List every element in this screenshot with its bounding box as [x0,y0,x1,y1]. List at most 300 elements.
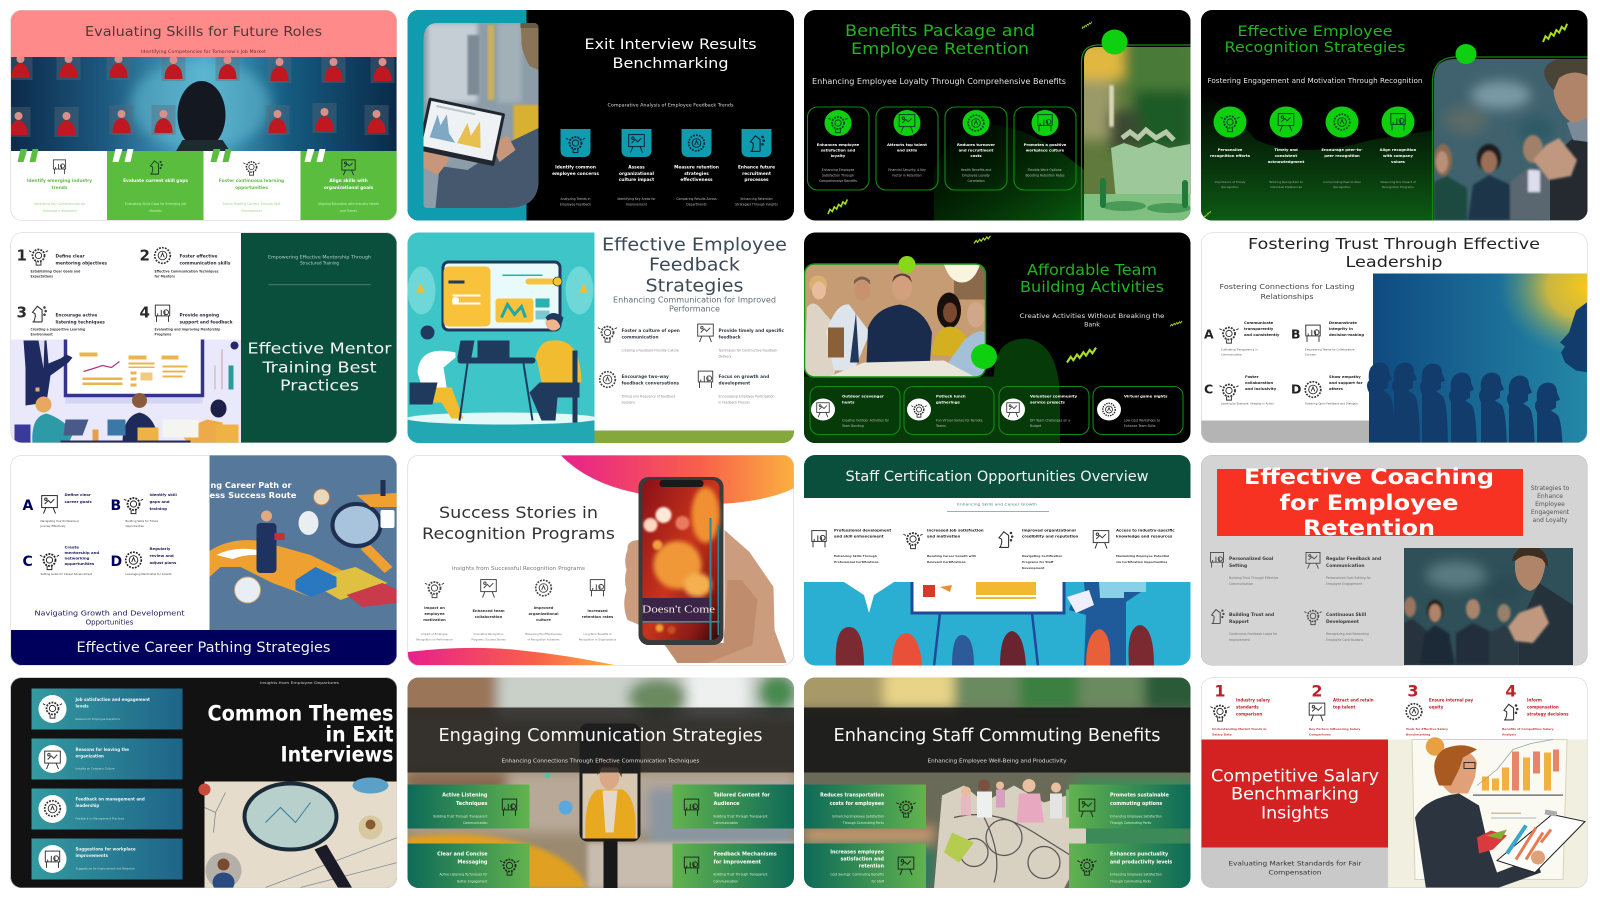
four numbered points: Comparisons [1309,732,1331,736]
four teal icon points [552,129,778,206]
right point cards: Enhancing Employee Satisfaction [1110,814,1162,818]
four outlined cards: Boosting Retention Rates [1025,174,1065,178]
four outlined cards: Enhancing Employee [822,168,854,172]
panel: Engaging Communication Strategies [398,668,804,888]
four outlined cards: costs [970,153,982,158]
four numbered points: 2 [1311,682,1323,700]
right point cards: Building Trust Through Transparent [714,814,768,818]
photo frame and dot [1432,44,1588,221]
right point cards: Tailored Content for [714,792,770,798]
subtitle: Relationships [1260,293,1314,301]
four point columns [10,149,398,221]
white content band: credibility and reputation [1022,534,1079,538]
panel: Common Themes in Exit Interviews [10,678,398,892]
left point cards: Enhancing Employee Satisfaction [832,814,884,818]
title: in Exit [326,722,394,746]
four career steps: Building Skills for Future [126,519,158,523]
four coaching points: Continuous Feedback Loops for [1229,632,1278,636]
four activity cards: Virtual game nights [1124,394,1168,398]
panel: Effective Employee Recognition Strategies [1201,10,1588,221]
left point cards [408,784,530,888]
illustration: training session [804,577,1191,666]
grey bar [1201,420,1373,444]
four feedback points: Encourage two-way [622,374,669,380]
four teal icon points: Improvement [626,202,648,206]
four point columns: Tomorrow's Workforce [41,209,77,213]
four circle points: Individual Preferences [1270,185,1302,189]
photo: smartphone filming speaker [398,668,804,888]
dark title band [408,708,794,772]
white content band: Professional Certifications [834,560,879,564]
right point cards: Audience [714,801,740,807]
four teal theme cards: leadership [76,803,99,808]
four outlined cards: workplace culture [1026,148,1065,152]
subtitle: Fostering Connections for Lasting [1220,283,1354,291]
title: Fostering Trust Through Effective [1248,235,1540,253]
right point cards: Enhances punctuality [1110,852,1169,858]
four leadership behaviours: Communicate [1244,320,1274,325]
four numbered points: 3 [1407,682,1419,700]
four outlined cards: Attracts top talent [887,142,927,147]
left point cards: Active Listening Techniques for [439,872,488,876]
four numbered points: 1 [1214,682,1226,700]
panel: Benefits Package and Employee Retention [804,10,1194,221]
four leadership behaviours: collaboration [1245,380,1274,385]
four numbered points: Inform [1527,698,1542,702]
green title side [241,232,398,444]
right point cards [1069,784,1191,888]
four recognition points: Programs: Success Stories [471,638,506,642]
right point cards: Through Commuting Perks [1109,880,1152,884]
four outlined cards: and skills [897,148,918,152]
white content band: Enhancing Skills and Career Growth [957,502,1037,506]
four coaching points: Regular Feedback and [1326,556,1381,562]
four numbered objectives: Provide ongoing [180,312,219,318]
four activity cards: Potluck lunch [936,394,966,398]
four recognition points: motivation [423,618,446,622]
four feedback points: feedback conversations [622,380,680,386]
four outlined cards [808,107,1076,190]
title: Exit Interview Results [584,37,756,53]
four circle points: Personalize [1218,147,1243,152]
four numbered points: top talent [1333,704,1355,710]
red title block [1217,469,1523,536]
photo: hand holding phone: Doesn't Come [642,604,715,616]
left point cards: Techniques [456,801,488,807]
photo: green paper people [1084,47,1190,220]
four numbered points: Key Factors Influencing Salary [1309,727,1360,731]
four circle points: peer recognition [1324,153,1360,158]
title: Employee Retention [851,39,1029,58]
title: Success Stories in [439,503,598,522]
subtitle: Compensation [1268,870,1322,876]
white content band: Access to industry-specific [1116,528,1175,532]
title: Effective Mentor [248,340,392,358]
four point columns: Development [241,209,263,213]
four leadership behaviours: and support for [1329,380,1363,385]
four teal theme cards: improvements [76,853,109,858]
four career steps: mentorship and [64,550,99,555]
four circle points: Recognition [1221,185,1239,189]
four numbered objectives: communication skills [180,260,231,266]
four leadership behaviours [1204,320,1364,406]
four numbered objectives: Environment [30,332,53,336]
photo: hand holding phone [624,477,786,663]
white content band: and skill enhancement [834,534,884,538]
four feedback points: Delivery [718,354,732,358]
four feedback points: Techniques for Constructive Feedback [718,348,777,352]
four career steps: adjust plans [150,560,177,565]
four career steps: training [150,506,167,511]
four activity cards: gatherings [936,400,960,404]
four career steps: B [110,498,121,514]
four leadership behaviours: Success [1305,352,1316,356]
title: Benefits Package and [845,21,1035,40]
title: Benchmarking [1231,784,1359,804]
four recognition points [416,580,617,642]
four numbered objectives: 4 [140,304,150,322]
four feedback points: Encouraging Employee Participation [718,394,775,398]
four point columns: Evaluating Skills Gaps for Emerging Job [125,202,186,206]
photo frame and dot [1082,30,1191,221]
four circle points: Align recognition [1380,147,1417,152]
white content band: Increased job satisfaction [927,528,984,532]
right point cards: Through Commuting Perks [1109,821,1152,825]
panel: Affordable Team Building Activities [804,232,1191,444]
four leadership behaviours: Show empathy [1329,374,1361,379]
squiggle middle [1066,348,1097,362]
four point columns: opportunities [235,185,268,191]
four teal icon points: recruitment [742,171,771,177]
title: Leadership [1346,253,1442,271]
title: Recognition Strategies [1224,40,1406,56]
four circle points: Recognition [1333,185,1351,189]
four outlined cards: Factor in Retention [892,174,922,178]
right point cards: Promotes sustainable [1110,792,1170,798]
subtitle: Enhance [1537,493,1563,500]
four coaching points: Building Trust and [1229,612,1274,618]
four numbered points: compensation [1527,704,1559,710]
four teal theme cards: Job satisfaction and engagement [74,697,150,702]
right point cards: and productivity levels [1110,860,1172,866]
title: Training Best [261,358,376,376]
white content band: Relevant Certifications [927,560,966,564]
panel: Exit Interview Results Benchmarking [408,10,794,221]
subtitle: Evaluating Market Standards for Fair [1228,860,1362,868]
four outlined cards: Employee Loyalty [962,174,990,178]
four numbered objectives: listening techniques [56,320,105,326]
white content band: Navigating Certification [1022,554,1062,558]
four leadership behaviours: and consistently [1244,332,1280,337]
four coaching points: Setting [1229,563,1247,569]
photo: blurred office and paper figures [794,668,1201,888]
subtitle: Fostering Engagement and Motivation Through Recognition [1208,77,1422,85]
four recognition points: Long-Term Benefits of [583,632,612,636]
four career steps: A [22,498,34,514]
right point cards: Building Trust Through Transparent [714,872,768,876]
four numbered objectives: for Mentors [154,274,175,278]
four coaching points: Personalized Goal Setting for [1326,576,1372,580]
subtitle: Empowering Effective Mentorship Through [268,254,371,260]
left point cards: Through Commuting Perks [842,821,884,825]
four leadership behaviours: D [1291,382,1301,396]
four leadership behaviours: Cultivating Transparency in [1221,348,1258,352]
four teal theme cards: Reasons for leaving the [76,747,129,752]
panel: Effective Coaching for Employee Retention [1201,455,1588,666]
left point cards: Building Trust Through Transparent [433,814,488,818]
four teal theme cards: Feedback on Management Practices [76,816,125,820]
squiggle top [973,236,991,244]
panel: Fostering Trust Through Effective Leadership [1201,232,1588,472]
four leadership behaviours: transparently [1244,326,1274,331]
four leadership behaviours: integrity in [1329,326,1353,331]
subtitle: Enhancing Communication for Improved [613,296,776,304]
panel: Effective Mentor Training Best Practices [10,232,398,444]
four feedback points: Timing and Frequency of Feedback [620,394,676,398]
squiggle right [1169,321,1183,326]
right point cards: Enhancing Employee Satisfaction [1110,872,1162,876]
photo: silhouettes facing leader [1367,274,1588,472]
four recognition points: collaboration [475,615,503,619]
title: Enhancing Staff Commuting Benefits [834,726,1160,746]
four teal theme cards: Feedback on management and [76,796,145,802]
title: Evaluating Skills for Future Roles [85,24,322,40]
four numbered objectives: 3 [16,304,27,322]
right point cards: commuting options [1110,801,1162,807]
left point cards [804,784,926,888]
four feedback points [598,324,784,404]
panel: Competitive Salary Benchmarking Insights [1201,678,1588,888]
title: Recognition Programs [422,524,615,543]
right point cards: Communication [714,821,738,825]
title: Interviews [280,742,394,766]
title: Affordable Team [1027,261,1157,279]
four numbered points: Tools for Effective Salary [1406,727,1448,731]
title: Retention [1303,516,1435,540]
four teal icon points: Identify common [555,164,596,170]
four leadership behaviours: Empowering Teams for Collaborative [1305,348,1355,352]
white content band: Boosting Career Growth with [927,554,976,558]
four teal theme cards: Reasons for Employee Departure [76,717,120,721]
white content band: Enhancing Skills Through [834,554,877,558]
left point cards: Active Listening [442,792,488,798]
title: Engaging Communication Strategies [438,726,762,746]
four teal icon points: Measure retention [674,164,719,170]
four activity cards: Low-Cost Workshops to [1124,418,1160,422]
photo: magnifier over network [198,778,398,892]
four activity cards: Fun Virtual Games for Remote [936,418,983,422]
four coaching points [1211,552,1381,642]
four numbered points: Ensure internal pay [1429,698,1473,702]
four leadership behaviours: B [1291,326,1301,342]
left point cards: Cost Savings: Commuting Benefits [830,872,884,876]
four coaching points: Development [1326,619,1359,625]
four numbered points: comparison [1236,712,1262,716]
subtitle: Comparative Analysis of Employee Feedback Trends [608,102,734,108]
four coaching points: Rapport [1229,619,1249,625]
header band [804,455,1191,498]
left point cards: satisfaction and [841,856,885,862]
four numbered objectives: 2 [140,246,150,264]
four career steps: Define clear [64,492,91,497]
four activity cards: Creative Outdoor Activities for [842,418,890,422]
panel: Evaluating Skills for Future Roles [6,10,398,221]
four point columns: Identify emerging industry [27,178,92,184]
four numbered objectives: 1 [16,246,27,264]
four activity cards: Enhance Team Skills [1124,424,1156,428]
four point columns: and Trends [340,209,357,213]
subtitle: Creative Activities Without Breaking the [1020,313,1165,320]
white content band [804,498,1191,582]
four point columns: Foster continuous learning [219,178,284,184]
four numbered points [1210,682,1569,736]
four outlined cards: and recruitment [959,148,994,152]
four recognition points: Enhanced team [472,609,505,613]
panel: Effective Career Pathing Strategies [10,455,398,666]
four outlined cards: Promotes a positive [1024,142,1067,147]
squiggle [1541,24,1569,42]
four feedback points: communication [622,334,659,340]
four numbered points: Benefits of Competitive Salary [1502,727,1554,731]
four recognition points: retention rates [582,615,614,619]
four coaching points: Employee Engagement [1326,582,1363,586]
title: Effective Employee [602,236,787,256]
four teal theme cards: levels [76,704,89,708]
four recognition points: Impact on [424,606,445,610]
four outlined cards: Enhances employee [817,142,860,147]
four recognition points: of Recognition Initiatives [527,638,560,642]
four activity cards [810,386,1183,434]
four teal theme cards: organization [76,754,104,758]
four numbered points: equity [1429,704,1444,710]
four recognition points: culture [536,618,551,622]
four numbered objectives: support and feedback [180,320,233,326]
four coaching points: Communication [1229,582,1253,586]
white content band: Programs for Staff [1022,560,1054,564]
illustration: analyst with charts [1388,737,1588,888]
four recognition points: Increased [587,609,608,613]
four leadership behaviours: Leading by Example: Integrity in Action [1221,402,1274,406]
subtitle: Navigating Growth and Development [34,610,185,618]
dark title band [804,708,1191,772]
four teal icon points: organizational [619,171,654,177]
four leadership behaviours: decision-making [1329,332,1364,337]
corner gradient top [560,455,794,504]
photo: pointing executive [1404,547,1573,666]
four career steps: Leveraging Mentorship for Growth [126,572,172,576]
photo frame and dots [804,256,997,377]
subtitle: Identifying Competencies for Tomorrow's Job Market [141,49,266,54]
four outlined cards: Health Benefits and [961,168,991,172]
four circle points: with company [1383,153,1413,158]
four career steps: Journey Effectively [40,524,66,528]
four leadership behaviours: others [1329,386,1344,391]
four activity cards: hunts [842,400,855,404]
title: Effective Coaching [1244,465,1494,489]
four numbered objectives: mentoring objectives [56,260,107,266]
right point cards: for Improvement [714,860,762,866]
four teal theme cards [32,688,182,880]
four numbered points: standards [1236,704,1259,710]
subtitle: Enhancing Employee Well-Being and Productivity [928,758,1067,764]
four activity cards: Outdoor scavenger [842,394,884,398]
four teal icon points: Strategies Through Insights [735,202,778,206]
photo: pointing executive [1434,58,1588,221]
four leadership behaviours: Fostering Open Feedback and Dialogue [1305,402,1358,406]
four activity cards: Volunteer community [1030,394,1078,398]
photo: team around table [804,264,985,376]
four teal icon points: processes [744,177,769,183]
four numbered points: Benchmarking [1406,732,1430,736]
four circle points: Measuring the Impact of [1380,180,1417,184]
title: Practices [280,376,359,394]
four recognition points: Innovative Recognition [474,632,504,636]
four leadership behaviours: Communication [1221,352,1242,356]
four outlined cards: Comprehensive Benefits [819,179,857,183]
four teal icon points: Analyzing Trends in [561,197,591,201]
four point columns: organizational goals [324,185,374,191]
four outlined cards: Flexible Work Options: [1028,168,1062,172]
four feedback points: development [718,380,750,386]
navy title bar [10,630,398,666]
left point cards: Clear and Concise [437,852,488,858]
four leadership behaviours: A [1204,326,1214,342]
four activity cards: service projects [1030,400,1066,404]
four career steps: Create [64,544,79,550]
four numbered objectives: Define clear [56,254,85,260]
title: for Employee [1280,491,1458,515]
squiggle top [1081,22,1092,29]
left point cards: costs for employees [830,801,884,807]
four recognition points: Impact of Employee [422,632,448,636]
four outlined cards: loyalty [831,153,846,158]
four recognition points: employee [424,612,445,616]
four numbered objectives [16,246,233,336]
left point cards: Better Engagement [457,880,488,884]
four recognition points: Recognition on Performance [416,638,453,642]
four teal icon points: Comparing Results Across [676,197,717,201]
four teal icon points: Identifying Key Areas for [617,197,656,201]
white content band: Maximizing Employee Potential [1116,554,1169,558]
four coaching points: Personalized Goal [1229,556,1274,562]
four feedback points: Focus on growth and [718,374,769,380]
four point columns: Identifying Key Competencies for [34,202,86,206]
four numbered objectives: Foster effective [180,254,218,260]
four coaching points: Recognizing and Rewarding [1326,632,1369,636]
four coaching points: Communication [1326,563,1364,569]
four career steps: C [22,554,33,570]
four numbered objectives: Effective Communication Techniques [154,270,219,274]
illustration: career route [210,455,398,631]
squiggle small [1204,210,1211,218]
four teal icon points: employee concerns [552,171,599,177]
four circle points: recognition efforts [1210,153,1251,158]
four point columns: Future-Proofing Careers Through Skill [223,202,280,206]
title: Effective Employee [1238,24,1393,40]
illustration: career route: ess Success Route [210,491,297,500]
four circle points: values [1391,159,1406,164]
corner gradient bottom [408,648,620,666]
subtitle: Insights from Successful Recognition Programs [452,566,585,572]
four activity cards: Teams [935,424,946,428]
panel: Effective Employee Feedback Strategies [406,232,794,444]
four recognition points: Recognition in Organizations [579,638,617,642]
four leadership behaviours: Foster [1245,374,1259,379]
four numbered points: Industry salary [1236,698,1270,702]
four point columns: Align skills with [329,178,368,184]
title: Strategies [646,276,744,296]
subtitle: Strategies to [1531,485,1570,492]
